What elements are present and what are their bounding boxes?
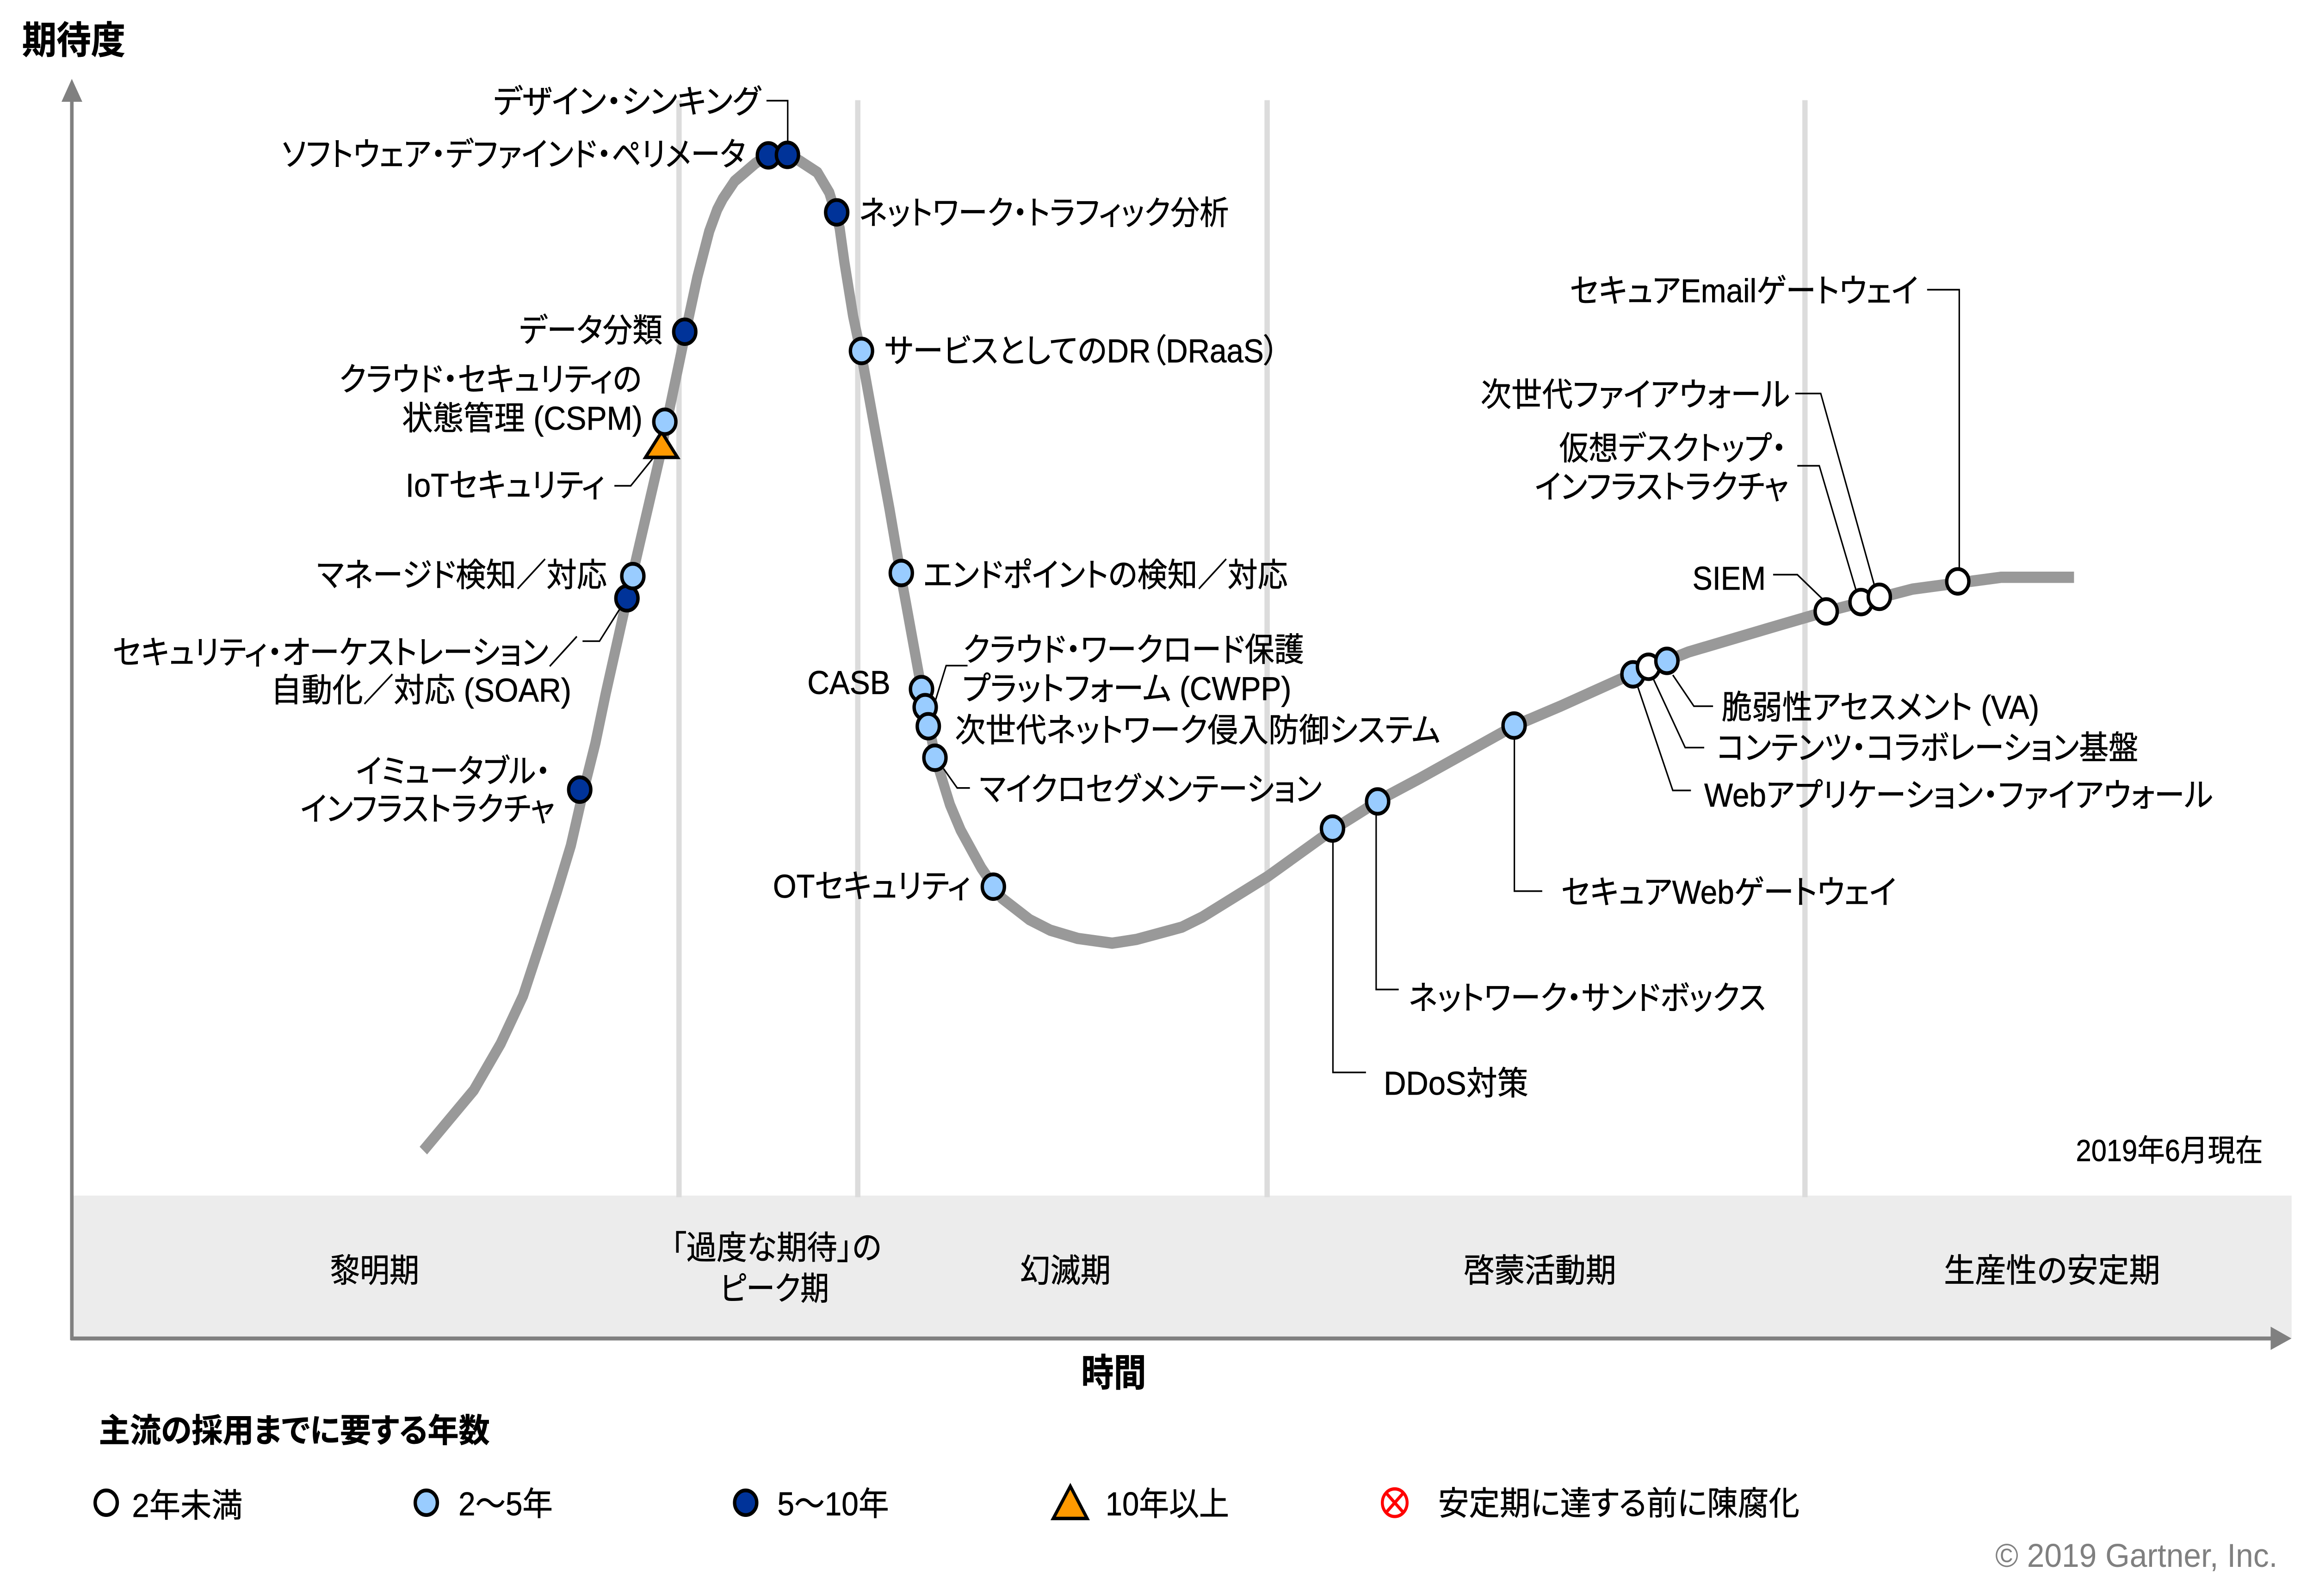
label: セキュアEmailゲートウェイ: [1570, 273, 1918, 309]
label: データ分類: [519, 313, 662, 349]
label: DDoS対策: [1384, 1066, 1528, 1102]
label: 仮想デスクトップ・: [1559, 431, 1787, 467]
label: インフラストラクチャ: [1535, 469, 1788, 505]
copyright: © 2019 Gartner, Inc.: [1995, 1538, 2277, 1574]
label: マネージド検知／対応: [317, 557, 607, 594]
marker: IoT triangle: [645, 432, 678, 457]
hype curve: [423, 154, 2074, 1151]
legend: [95, 1413, 1800, 1524]
callout leader lines: [582, 101, 1959, 1072]
phase: slope of enlightenment: 啓蒙活動期: [1464, 1253, 1616, 1289]
x axis title: 時間: [1081, 1353, 1146, 1394]
label: ネットワーク・トラフィック分析: [859, 195, 1229, 232]
label: プラットフォーム (CWPP): [962, 671, 1291, 707]
y axis arrow: [62, 79, 82, 1340]
label: イミュータブル・: [356, 753, 550, 790]
label: ネットワーク・サンドボックス: [1409, 980, 1766, 1017]
legend: obsolete before plateau: 安定期に達する前に陳腐化: [1438, 1485, 1800, 1522]
label: 状態管理 (CSPM): [402, 401, 643, 437]
legend: 2 to 5 years: 2～5年: [458, 1486, 553, 1522]
label: 次世代ファイアウォール: [1481, 377, 1790, 413]
technology labels: [113, 84, 2213, 1102]
label: ソフトウェア・デファインド・ペリメータ: [282, 136, 746, 173]
label: SIEM: [1692, 561, 1766, 597]
legend: under 2 years: 2年未満: [132, 1488, 243, 1524]
label: 脆弱性アセスメント (VA): [1722, 690, 2039, 726]
x axis arrow: [71, 1327, 2291, 1350]
y axis title: 期待度: [22, 20, 125, 62]
phase: peak of inflated expectations: [671, 1230, 882, 1307]
label: コンテンツ・コラボレーション基盤: [1717, 730, 2138, 766]
legend: 5 to 10 years: 5～10年: [777, 1486, 889, 1522]
legend: over 10 years: [1053, 1486, 1229, 1522]
label: サービスとしてのDR（DRaaS）: [884, 333, 1279, 370]
as-of date: 2019年6月現在: [2076, 1134, 2263, 1168]
label: Webアプリケーション・ファイアウォール: [1704, 777, 2213, 814]
label: クラウド・ワークロード保護: [963, 632, 1304, 668]
phase band: [72, 1195, 2292, 1338]
label: エンドポイントの検知／対応: [923, 557, 1288, 594]
phase: peak of inflated expectations: ピーク期: [720, 1271, 829, 1307]
label: セキュリティ・オーケストレーション／: [113, 635, 578, 671]
phase: plateau of productivity: 生産性の安定期: [1944, 1253, 2160, 1289]
label: 次世代ネットワーク侵入防御システム: [955, 713, 1441, 749]
phase dividers: [679, 100, 1805, 1197]
label: デザイン・シンキング: [494, 84, 761, 120]
label: 自動化／対応 (SOAR): [271, 672, 571, 709]
technology markers on curve: [569, 142, 1969, 899]
legend: over 10 years: 10年以上: [1106, 1486, 1229, 1522]
phase: trough of disillusionment: 幻滅期: [1020, 1253, 1111, 1289]
label: セキュアWebゲートウェイ: [1561, 875, 1896, 911]
legend title: 主流の採用までに要する年数: [99, 1413, 490, 1449]
label: インフラストラクチャ: [301, 791, 555, 828]
phase: peak of inflated expectations: 「過度な期待」の: [671, 1230, 882, 1266]
label: OTセキュリティ: [773, 869, 971, 905]
label: CASB: [807, 665, 891, 701]
legend: 2 to 5 years: [415, 1486, 553, 1522]
label: マイクロセグメンテーション: [979, 771, 1322, 808]
phase labels: [330, 1230, 2160, 1307]
phase: innovation trigger: 黎明期: [330, 1253, 419, 1289]
label: IoTセキュリティ: [406, 468, 605, 504]
label: クラウド・セキュリティの: [339, 362, 642, 398]
